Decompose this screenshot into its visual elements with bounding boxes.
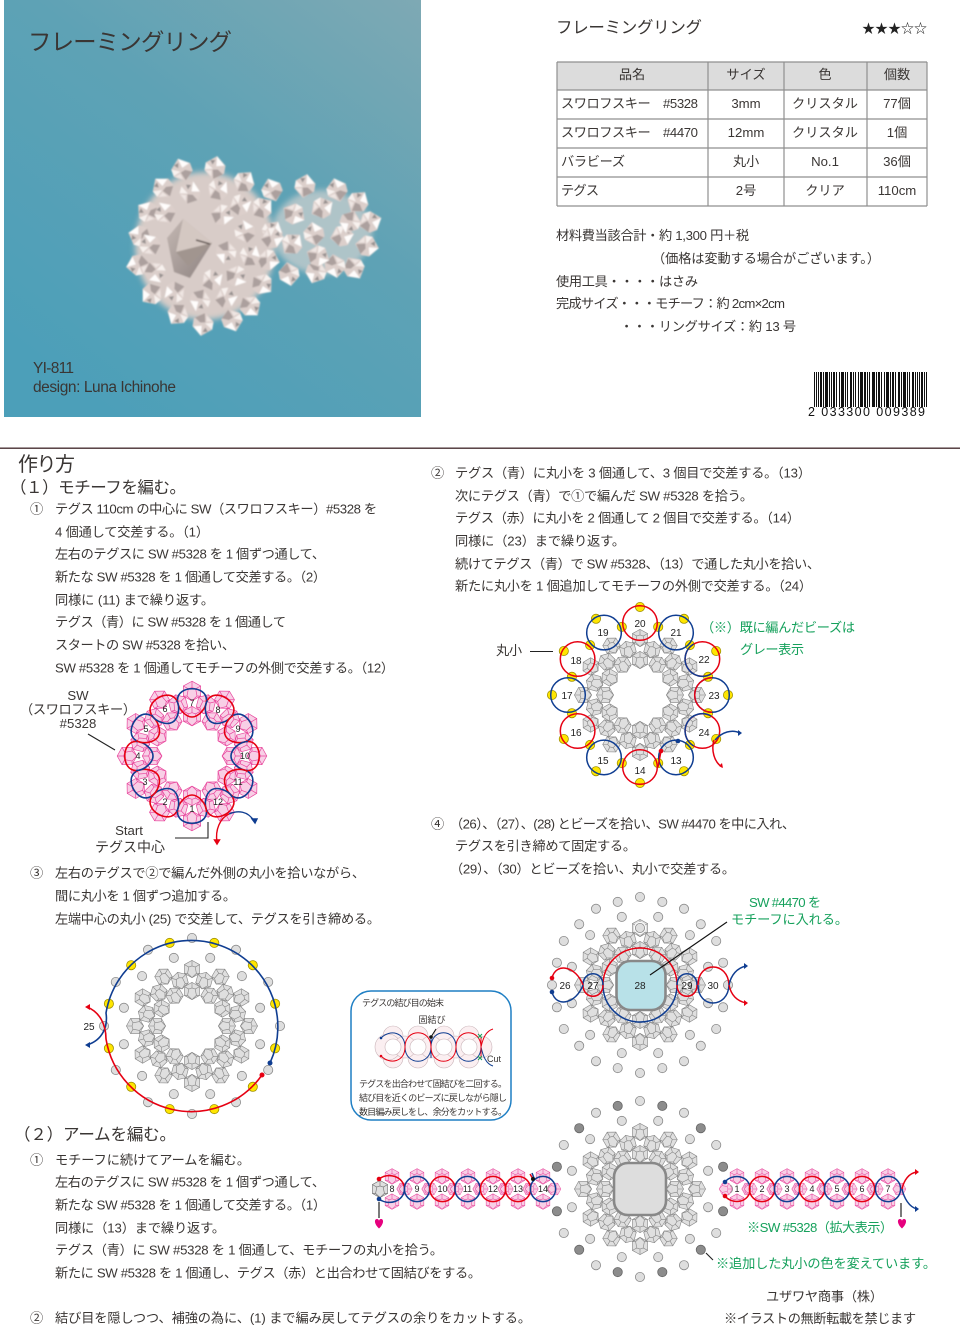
callout: knot finishing: 数目編み戻しをし、余分をカットする。 [359, 1106, 507, 1117]
diagram: step 2 motif [547, 602, 742, 788]
numbers: 21 [670, 628, 682, 639]
materials table: 110cm [878, 183, 916, 198]
bead numbers: 2 [162, 797, 168, 807]
step 4 text [431, 817, 795, 877]
thread circles [551, 606, 740, 784]
arm step text: 左右のテグスに SW #5328 を 1 個ずつ通して、 [55, 1175, 325, 1190]
numbers: 22 [698, 655, 710, 666]
materials table: 2号 [736, 183, 756, 198]
callout: knot finishing: テグスを出合わせて固結びを二回する。 [359, 1078, 507, 1089]
label: start: テグス中心 [95, 839, 165, 855]
diagram: right arm [719, 1169, 919, 1228]
materials table: 3mm [731, 96, 761, 111]
materials notes: ・・・リングサイズ：約 13 号 [620, 319, 796, 334]
step 4 text: テグスを引き締めて固定する。 [455, 839, 636, 854]
note: grey beads: グレー表示 [740, 642, 804, 657]
step 3 text: 間に丸小を 1 個ずつ追加する。 [55, 889, 236, 904]
step 4 text: （26）、（27）、(28) とビーズを拾い、SW #4470 を中に入れ、 [450, 817, 795, 832]
step 2 text: 新たに丸小を 1 個追加してモチーフの外側で交差する。（24） [455, 579, 812, 594]
step 3 text [30, 866, 380, 927]
diagram: step 4 motif: 29 [681, 981, 693, 992]
pink beads [115, 679, 269, 833]
barcode: 2 033300 009389 [808, 405, 925, 419]
bead numbers: 5 [143, 724, 149, 734]
label: start [95, 823, 165, 855]
step 1 text [30, 502, 394, 676]
diagram: left arm: 9 [414, 1184, 420, 1194]
diagram: left arm: 11 [463, 1184, 472, 1194]
step 2 text: テグス（青）に丸小を 3 個通して、3 個目で交差する。（13） [455, 466, 811, 481]
copyright note: ※イラストの無断転載を禁じます [724, 1311, 916, 1326]
crystal 28 [616, 961, 666, 1010]
label: start: Start [115, 823, 143, 838]
step 2 text: 同様に（23）まで繰り返す。 [455, 534, 625, 549]
arm step text: テグス（青）に SW #5328 を 1 個通して、モチーフの丸小を拾う。 [55, 1243, 443, 1258]
step 1 text: スタートの SW #5328 を拾い、 [55, 638, 235, 653]
step 2 text: テグス（赤）に丸小を 2 個通して 2 個目で交差する。（14） [455, 511, 800, 526]
materials notes: 完成サイズ・・・モチーフ：約 2cm×2cm [556, 296, 785, 311]
diagram: right arm: 7 [885, 1184, 891, 1194]
diagram: right arm: 2 [759, 1184, 765, 1194]
note: SW 4470: モチーフに入れる。 [731, 912, 848, 927]
step 1 text: 左右のテグスに SW #5328 を 1 個ずつ通して、 [55, 547, 325, 562]
materials table: 77個 [883, 96, 911, 111]
step 4 text: ④ [431, 817, 444, 832]
product photo [4, 0, 421, 417]
arm step text: 新たな SW #5328 を 1 個通して交差する。（1） [55, 1198, 326, 1213]
step 2 text: 続けてテグス（青）で SW #5328、（13）で通した丸小を拾い、 [455, 557, 820, 572]
diagram: right arm: 4 [809, 1184, 815, 1194]
diagram: left arm: 13 [513, 1184, 523, 1194]
materials table: 個数 [884, 67, 910, 82]
diagram: left arm: 14 [538, 1184, 548, 1194]
numbers: 20 [634, 619, 646, 630]
step 2 text [431, 466, 820, 594]
materials table: スワロフスキー #5328 [561, 96, 698, 111]
designer: design: Luna Ichinohe [33, 379, 176, 396]
bead numbers: 7 [189, 698, 195, 708]
arm step text: 同様に（13）まで繰り返す。 [55, 1221, 225, 1236]
diagram: right arm: 3 [784, 1184, 790, 1194]
difficulty stars: ★★★☆☆ [862, 18, 927, 37]
step 3 text: ③ [30, 866, 43, 881]
callout: knot finishing: 結び目を近くのビーズに戻しながら隠し [359, 1092, 507, 1103]
step 3 text: 左右のテグスで②で編んだ外側の丸小を拾いながら、 [55, 866, 365, 881]
thread tails [214, 812, 257, 844]
step 1 text: ① [30, 502, 43, 517]
diagram: first motif in pink [88, 679, 269, 844]
heading: motif: （１）モチーフを編む。 [10, 478, 186, 497]
callout: knot finishing: テグスの結び目の始末 [362, 997, 444, 1008]
materials table: 丸小 [733, 154, 759, 169]
numbers: 19 [597, 628, 609, 639]
ring illustration [124, 154, 385, 338]
materials table: バラビーズ [561, 154, 625, 169]
step 4 text: （29）、（30）とビーズを拾い、丸小で交差する。 [450, 862, 735, 877]
numbers: 13 [670, 756, 682, 767]
note: enlarged view: ※SW #5328（拡大表示） [747, 1220, 893, 1235]
diagram: step 4 motif: 30 [707, 981, 719, 992]
materials table: スワロフスキー #4470 [561, 125, 698, 140]
arm step text: ② [30, 1311, 43, 1326]
materials table [557, 62, 927, 206]
step 1 text: テグス 110cm の中心に SW（スワロフスキー）#5328 を [55, 502, 377, 517]
materials table: クリスタル [792, 96, 858, 111]
label: SW [20, 688, 136, 731]
materials notes: （価格は変動する場合がございます。） [652, 250, 880, 266]
numbers: 23 [708, 691, 720, 702]
item number: YI-811 [33, 360, 74, 377]
step 1 text: 新たな SW #5328 を 1 個通して交差する。（2） [55, 570, 326, 585]
bead numbers [135, 698, 250, 814]
numbers: 24 [698, 728, 710, 739]
materials notes: 材料費当該合計・約 1,300 円＋税 [556, 228, 749, 243]
numbers: 16 [570, 728, 582, 739]
step 3 text: 左端中心の丸小 (25) で交差して、テグスを引き締める。 [55, 912, 380, 927]
bead numbers: 3 [142, 777, 148, 787]
note: SW 4470 [731, 895, 848, 927]
product heading: フレーミングリング [556, 18, 702, 37]
materials notes [556, 228, 880, 334]
diagram: step 3 motif: 25 [83, 1022, 95, 1033]
step 2 text: 次にテグス（青）で①で編んだ SW #5328 を拾う。 [455, 489, 753, 504]
section title: 作り方 [18, 453, 75, 476]
barcode [808, 372, 927, 419]
numbers: 17 [561, 691, 573, 702]
diagram: right arm: 6 [859, 1184, 865, 1194]
label: small round bead: 丸小 [496, 643, 522, 658]
materials table: 品名 [619, 67, 645, 82]
note: SW 4470: SW #4470 を [749, 895, 821, 910]
step 1 text: 4 個通して交差する。（1） [55, 525, 209, 540]
diagram: right arm: 5 [834, 1184, 840, 1194]
knot diagram [375, 1026, 493, 1068]
note: bead colour: ※追加した丸小の色を変えています。 [716, 1256, 936, 1271]
numbers: 14 [634, 766, 646, 777]
label: small round bead [496, 643, 553, 658]
arm step text: モチーフに続けてアームを編む。 [55, 1153, 250, 1168]
diagram: finished motif [547, 1096, 733, 1282]
photo title: フレーミングリング [28, 29, 232, 55]
thread loops [125, 689, 259, 823]
materials table: 36個 [883, 154, 911, 169]
bead numbers: 1 [189, 804, 195, 814]
materials table: No.1 [811, 154, 839, 169]
arm step text: 結び目を隠しつつ、補強の為に、(1) まで編み戻してテグスの余りをカットする。 [55, 1311, 531, 1326]
callout: knot finishing: Cut [487, 1054, 502, 1064]
callout: knot finishing [351, 991, 511, 1120]
diagram: step 4 motif [547, 892, 748, 1078]
diagram: step 4 motif: 26 [559, 981, 571, 992]
diagram: right arm: 1 [734, 1184, 740, 1194]
numbers: 18 [570, 656, 582, 667]
bead numbers: 10 [240, 751, 250, 761]
arm step text: ① [30, 1153, 43, 1168]
step 2 text: ② [431, 466, 444, 481]
numbers [561, 619, 720, 777]
diagram: left arm [372, 1169, 561, 1228]
numbers: 15 [597, 756, 609, 767]
heading: arm: （２）アームを編む。 [14, 1125, 176, 1144]
note: grey beads: （※）既に編んだビーズは [701, 620, 855, 635]
materials notes: 使用工具・・・・はさみ [556, 273, 698, 289]
bead numbers: 8 [215, 705, 221, 715]
materials table: サイズ [726, 67, 766, 82]
company: ユザワヤ商事（株） [766, 1289, 883, 1304]
label: SW: #5328 [60, 716, 96, 731]
step 1 text: 同様に (11) まで繰り返す。 [55, 593, 214, 608]
bead numbers: 12 [213, 797, 223, 807]
arm step text: 新たに SW #5328 を 1 個通し、テグス（赤）と出合わせて固結びをする。 [55, 1266, 481, 1281]
diagram: step 4 motif: 27 [587, 981, 599, 992]
materials table: クリスタル [792, 125, 858, 140]
diagram: left arm: 8 [389, 1184, 395, 1194]
step 1 text: SW #5328 を 1 個通してモチーフの外側で交差する。（12） [55, 661, 394, 676]
note: grey beads [701, 620, 855, 657]
bead numbers: 11 [233, 777, 243, 787]
arm step text [30, 1153, 531, 1326]
materials table: 1個 [887, 125, 907, 140]
bead numbers: 6 [162, 704, 168, 714]
label: SW: SW [67, 688, 89, 703]
materials table: 色 [818, 67, 832, 82]
bead numbers: 9 [235, 724, 241, 734]
label: SW: （スワロフスキー） [20, 702, 136, 717]
diagram: left arm: 10 [437, 1184, 448, 1194]
materials table: テグス [561, 183, 599, 198]
materials table: 12mm [728, 125, 764, 140]
diagram: step 4 motif: 28 [634, 981, 646, 992]
bead numbers: 4 [135, 751, 141, 761]
diagram: left arm: 12 [488, 1184, 498, 1194]
materials table: クリア [805, 183, 845, 198]
callout: knot finishing: 固結び [418, 1014, 446, 1025]
step 1 text: テグス（青）に SW #5328 を 1 個通して [55, 615, 286, 630]
diagram: step 3 motif [83, 933, 285, 1119]
